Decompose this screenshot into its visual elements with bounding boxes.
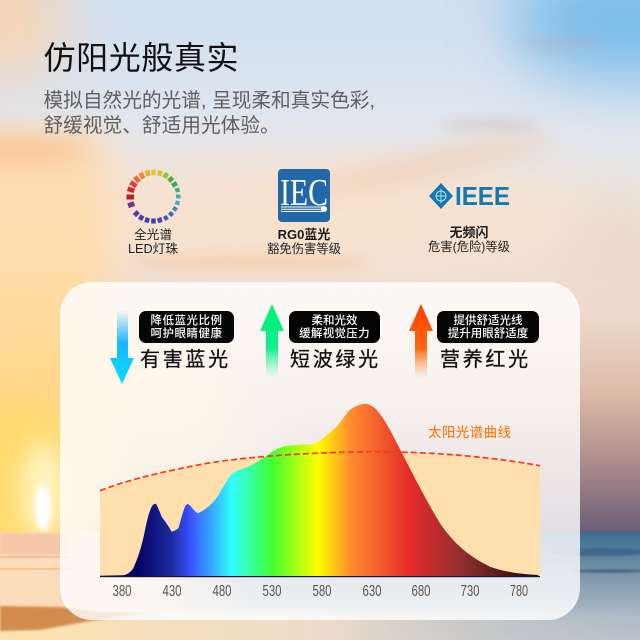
callout: soft light: 柔和光效 [312, 313, 358, 327]
axis labels: 480 [212, 583, 232, 600]
label: harmful blue light: 有害蓝光 [140, 348, 231, 371]
label: short-wave green light: 短波绿光 [290, 348, 381, 371]
axis labels: 680 [412, 583, 431, 600]
arrow: blue down [110, 310, 134, 384]
caption: no flicker: 无频闪 [449, 225, 489, 240]
caption: RG0 blue light: 豁免伤害等级 [267, 241, 341, 256]
icon: IEC logo [278, 169, 330, 222]
icon: full-spectrum LED ring [126, 170, 180, 224]
label: solar spectrum curve: 太阳光谱曲线 [428, 425, 512, 440]
title: 仿阳光般真实 [44, 40, 239, 76]
arrow: red up [409, 304, 433, 378]
icon: IEEE logo: IEEE [455, 181, 510, 211]
caption: no flicker [428, 225, 510, 254]
callout: comfortable light: 提升用眼舒适度 [448, 326, 529, 340]
panel: spectrum card [60, 282, 580, 620]
caption: RG0 blue light: RG0蓝光 [278, 227, 330, 242]
caption: full-spectrum LED: LED灯珠 [128, 242, 178, 256]
subtitle text: 舒缓视觉、舒适用光体验。 [44, 115, 280, 137]
callout: soft light [289, 311, 380, 343]
sunlight curve area [100, 452, 540, 577]
callout: reduce blue light: 呵护眼睛健康 [150, 326, 222, 340]
chart: LED spectrum vs sunlight [100, 404, 540, 577]
subtitle text [44, 90, 375, 137]
icon: IEEE logo [429, 181, 510, 211]
axis labels: 580 [312, 583, 332, 600]
caption: full-spectrum LED: 全光谱 [134, 227, 172, 242]
subtitle text: 模拟自然光的光谱, 呈现柔和真实色彩, [44, 90, 375, 112]
caption: RG0 blue light [267, 227, 341, 256]
caption: full-spectrum LED [128, 227, 178, 256]
axis labels: 780 [510, 583, 528, 600]
callout: soft light: 缓解视觉压力 [299, 326, 370, 340]
axis labels: 730 [460, 583, 480, 600]
axis labels: 430 [162, 583, 182, 600]
label: nourishing red light: 营养红光 [440, 348, 531, 371]
arrow: green up [260, 304, 284, 378]
axis labels: 380 [112, 583, 132, 600]
LED spectrum area [100, 404, 538, 577]
axis labels: 530 [262, 583, 282, 600]
caption: no flicker: 危害(危险)等级 [428, 239, 510, 254]
baseline [100, 576, 540, 577]
callout: comfortable light [437, 311, 539, 343]
solar spectrum dashed curve [100, 452, 540, 491]
axis labels: 630 [362, 583, 382, 600]
callout: comfortable light: 提供舒适光线 [454, 313, 523, 327]
callout: reduce blue light: 降低蓝光比例 [150, 313, 222, 327]
callout: reduce blue light [139, 311, 234, 343]
axis labels [112, 583, 528, 600]
icon: IEC logo: IEC [280, 172, 328, 214]
